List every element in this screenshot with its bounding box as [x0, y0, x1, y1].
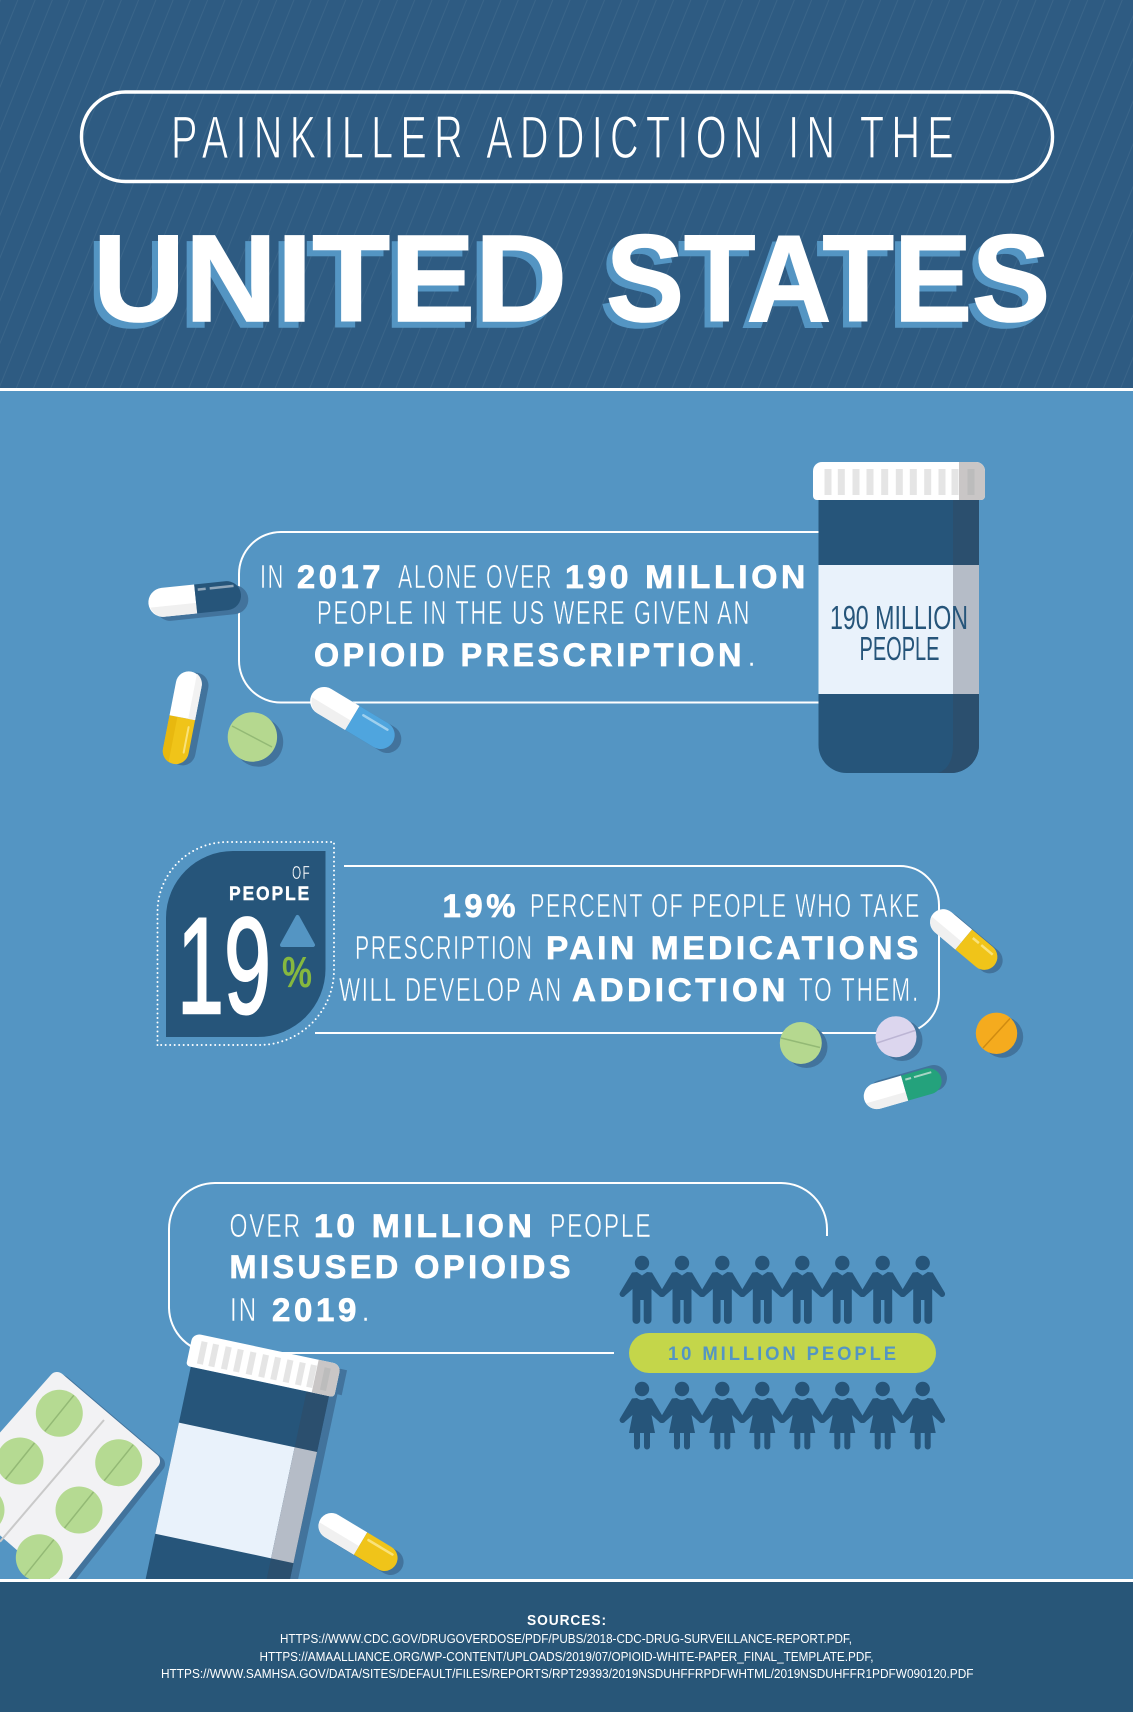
text block 2: PRESCRIPTION	[355, 929, 534, 966]
badge: 19% of people: PEOPLE	[229, 884, 311, 905]
icon: green tablet 2	[780, 1022, 828, 1068]
panel: 190 million prescriptions	[147, 462, 985, 773]
icon: yellow capsule	[161, 669, 211, 768]
speech outline 3	[169, 1183, 827, 1353]
main title	[93, 211, 1050, 348]
text block 3	[230, 1207, 652, 1328]
text block 3: 2019	[272, 1292, 360, 1328]
icon: pill bottle: PEOPLE	[860, 630, 940, 667]
text block 2: 19%	[442, 888, 519, 924]
text block 1: IN	[260, 558, 285, 595]
footer: sources: HTTPS://WWW.CDC.GOV/DRUGOVERDOSE/PDF/PUBS/2018-CDC-DRUG-SURVEILLANCE-REPORT.PDF,	[280, 1631, 852, 1646]
text block 1: 2017	[297, 559, 384, 595]
text block 1: 190 MILLION	[565, 559, 809, 595]
text block 3: 10 MILLION	[314, 1208, 536, 1244]
text block 1	[260, 558, 809, 673]
text block 3: OVER	[230, 1207, 302, 1244]
icon: green tablet	[228, 712, 283, 767]
text block 1: ALONE OVER	[398, 558, 553, 595]
icon: navy capsule	[147, 580, 250, 622]
label pill: 10 million people: 10 MILLION PEOPLE	[668, 1344, 899, 1365]
speech outline 1	[239, 532, 819, 702]
icon row: men	[620, 1256, 945, 1324]
icon: pill bottle	[813, 462, 985, 773]
text block 3: IN	[230, 1291, 258, 1328]
icon: tilted pill bottle	[146, 1334, 347, 1579]
text block 2: ADDICTION	[572, 972, 789, 1008]
main title: UNITED	[93, 211, 567, 348]
text block 3: MISUSED OPIOIDS	[230, 1249, 574, 1285]
subtitle pill	[82, 92, 1052, 182]
badge: 19% of people: %	[282, 948, 312, 997]
panel: 10 million misused	[0, 1182, 945, 1579]
footer: sources: SOURCES:	[527, 1612, 607, 1629]
text block 3: PEOPLE	[550, 1207, 652, 1244]
main title: STATES	[606, 211, 1050, 348]
text block 2: PERCENT OF PEOPLE WHO TAKE	[530, 887, 921, 924]
footer: sources: HTTPS://AMAALLIANCE.ORG/WP-CONTENT/UPLOADS/2019/07/OPIOID-WHITE-PAPER_FINAL_TEMPLATE.PDF,	[260, 1649, 874, 1664]
badge: 19% of people	[158, 842, 334, 1045]
icon: blister pack	[0, 1380, 157, 1581]
label pill: 10 million people	[629, 1333, 936, 1373]
icon: lilac tablet	[876, 1016, 922, 1061]
badge: 19% of people: 19	[177, 890, 271, 1043]
icon: blue capsule	[305, 682, 406, 758]
icon: yellow capsule 2	[925, 904, 1008, 979]
header panel	[0, 0, 1133, 391]
text block 1: PEOPLE IN THE US WERE GIVEN AN	[317, 594, 751, 631]
text block 2	[339, 887, 922, 1008]
speech outline 2	[315, 866, 939, 1033]
text block 1: .	[747, 636, 759, 673]
panel: 19 percent addiction	[158, 842, 1023, 1112]
icon: green capsule	[861, 1062, 950, 1112]
badge: 19% of people: OF	[292, 863, 311, 883]
illustration: blister pack, bottle and capsule	[0, 1334, 404, 1579]
text block 1: OPIOID PRESCRIPTION	[314, 637, 745, 673]
footer: sources: HTTPS://WWW.SAMHSA.GOV/DATA/SITES/DEFAULT/FILES/REPORTS/RPT29393/2019NSDUHFFRPDFWHTML/2019NSDUHFFR1PDFW090120.PDF	[161, 1666, 974, 1681]
text block 2: PAIN MEDICATIONS	[546, 930, 922, 966]
icon: yellow capsule 3	[318, 1513, 404, 1575]
icon: pill bottle: 190 MILLION	[830, 599, 968, 636]
text block 3: .	[361, 1291, 373, 1328]
text block 2: WILL DEVELOP AN	[339, 971, 563, 1008]
icon: orange tablet	[976, 1013, 1023, 1058]
footer: sources	[0, 1579, 1133, 1712]
icon row: women	[620, 1382, 945, 1450]
text block 2: TO THEM.	[799, 971, 920, 1008]
